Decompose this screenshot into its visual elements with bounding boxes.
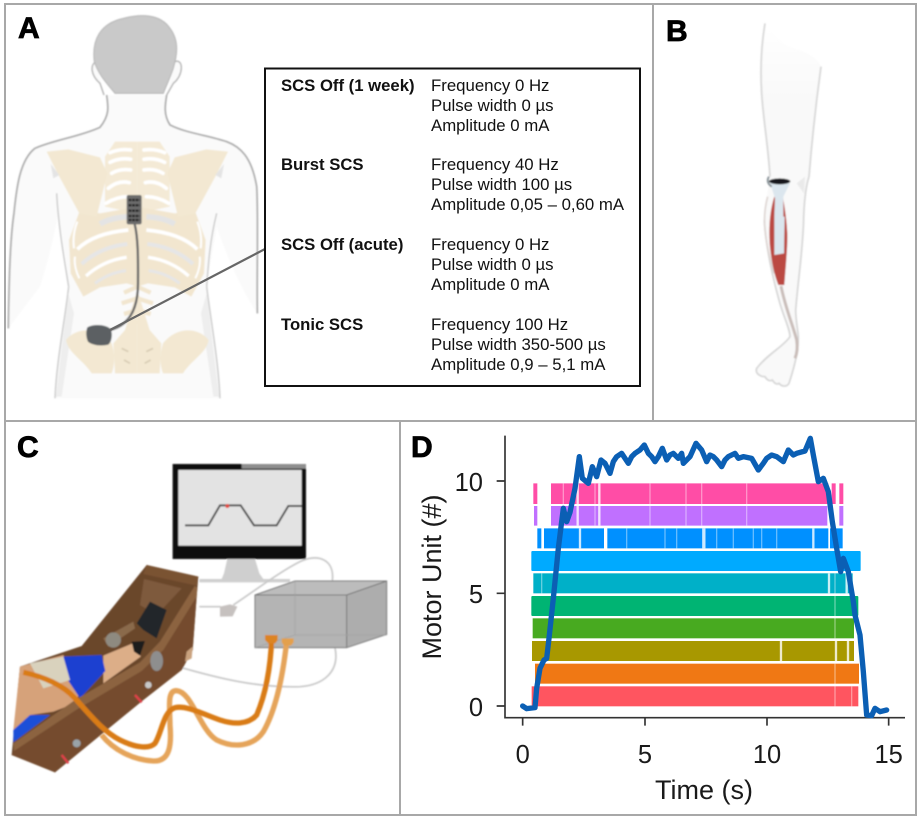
setting: Burst SCS: Frequency 40 Hz [431,155,559,174]
cursor dot [225,504,229,508]
panel letter C: C [17,431,39,464]
y axis tick labels: 5 [469,581,483,609]
setting: Burst SCS: Amplitude 0,05 – 0,60 mA [431,195,625,214]
raster plot with force trace [497,436,905,726]
setting: SCS Off acute: Pulse width 0 µs [431,255,554,274]
y axis tick labels: 0 [469,694,483,722]
x axis tick labels: 10 [753,741,781,769]
x axis tick labels [516,741,903,769]
icon: pulse generator [86,325,112,346]
icon: implanted paddle electrode [127,195,142,224]
setting: SCS Off 1 week [281,76,554,135]
orange dark cable [23,638,272,747]
setting: Burst SCS [281,155,625,214]
x axis tick labels: 15 [875,741,903,769]
setting: Tonic SCS: Frequency 100 Hz [431,315,568,334]
adapter [220,604,237,617]
setting: Burst SCS: Burst SCS [281,155,364,174]
panel B: lower leg muscle [653,4,916,421]
force trace line [523,438,887,716]
setting: SCS Off 1 week: Frequency 0 Hz [431,76,549,95]
setting: SCS Off acute: SCS Off (acute) [281,235,403,254]
panel D: motor unit raster chart [400,421,916,815]
y axis tick labels [455,469,483,722]
parameter table [265,68,640,386]
illustration: setup [12,464,387,772]
cable connectors [265,635,278,643]
panel A: stimulation site and parameters [5,4,653,421]
setting: Tonic SCS: Amplitude 0,9 – 5,1 mA [431,355,606,374]
panel letter B: B [666,15,688,48]
motor unit bars [531,483,861,706]
setting: Burst SCS: Pulse width 100 µs [431,175,572,194]
setting: Tonic SCS: Pulse width 350-500 µs [431,335,606,354]
tendon [781,286,797,358]
amplifier box [255,581,387,648]
panel C: experimental setup [5,421,400,815]
setting: SCS Off acute: Amplitude 0 mA [431,275,550,294]
illustration: back with implanted SCS [8,16,257,398]
x axis title: Time (s) [655,775,753,805]
lead wire [110,224,138,330]
axes [497,436,905,726]
cables [182,558,336,687]
panel letter A: A [18,12,40,45]
connector line to parameter box [110,249,265,330]
y axis tick labels: 10 [455,469,483,497]
orange light cable [102,642,287,761]
panel letter D: D [411,431,433,464]
ultrasound probe [768,177,790,255]
setting: SCS Off 1 week: Amplitude 0 mA [431,116,550,135]
setting: Tonic SCS: Tonic SCS [281,315,363,334]
setting: Tonic SCS [281,315,606,374]
setting: SCS Off 1 week: SCS Off (1 week) [281,76,415,95]
setting: SCS Off 1 week: Pulse width 0 µs [431,96,554,115]
illustration: leg with tibialis anterior and probe [756,23,821,386]
target force trace [185,505,302,525]
setting: SCS Off acute [281,235,554,294]
x axis tick labels: 5 [638,741,652,769]
x axis tick labels: 0 [516,741,530,769]
setting: SCS Off acute: Frequency 0 Hz [431,235,549,254]
muscle [769,197,787,285]
y axis title: Motor Unit (#) [417,494,447,660]
wooden brace with arm [12,565,198,772]
monitor [173,464,306,582]
